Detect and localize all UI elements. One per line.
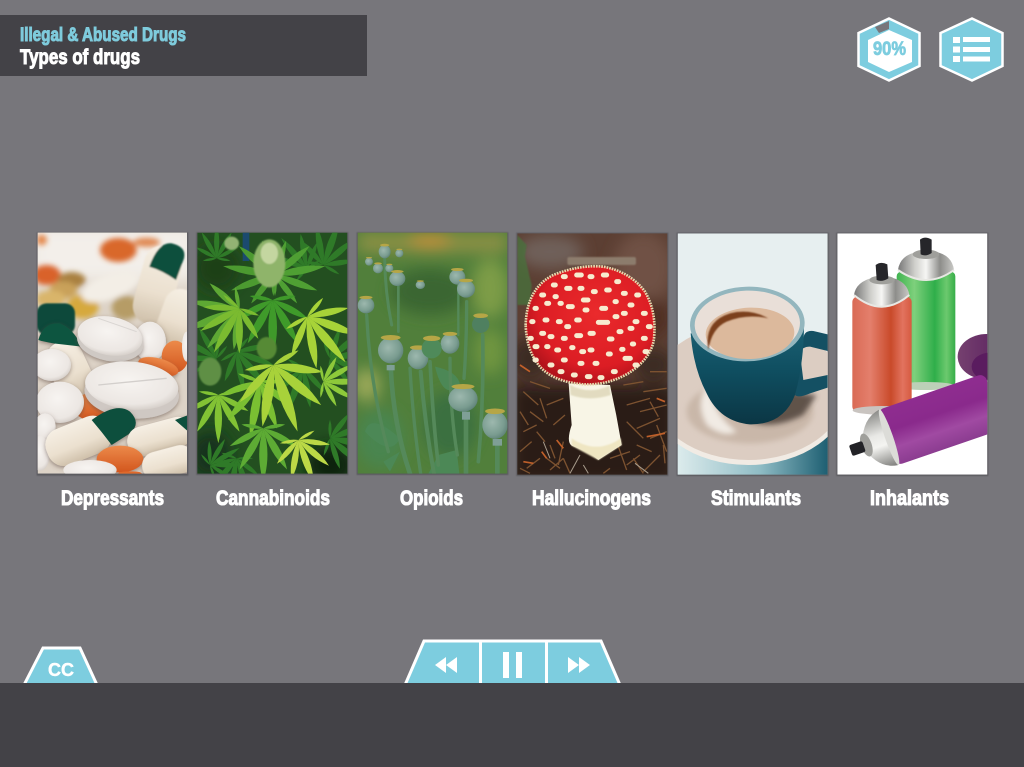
playback controls: [405, 641, 620, 685]
purple can: [849, 375, 988, 466]
label: Opioids: Opioids: [400, 486, 463, 510]
image card: Cannabinoids plant: [196, 232, 348, 476]
label: Cannabinoids: Cannabinoids: [216, 486, 330, 510]
course title: Illegal & Abused Drugs: [20, 25, 186, 46]
label: Stimulants: Stimulants: [711, 486, 801, 510]
icon: fast forward: [568, 657, 590, 673]
image card: Hallucinogens mushroom: [516, 232, 668, 476]
purple cap: [958, 334, 988, 380]
image card: Opioids poppy pods: [353, 232, 508, 475]
image card: Depressants pills: [30, 225, 202, 483]
icon: pause: [503, 652, 522, 678]
label: Depressants: Depressants: [61, 486, 164, 510]
footer bar: [0, 683, 1024, 767]
menu button: [940, 18, 1002, 80]
header bar: [0, 15, 367, 76]
progress badge: 90%: [858, 18, 920, 80]
green can: [897, 238, 955, 390]
label: Inhalants: Inhalants: [870, 486, 949, 510]
image card: Stimulants coffee cup: [676, 232, 829, 476]
red can: [852, 263, 912, 415]
icon: rewind: [435, 657, 457, 673]
image card: Inhalants spray cans: [836, 232, 988, 476]
closed captions button: CC: [48, 660, 74, 680]
closed captions button: [24, 648, 97, 685]
label: Hallucinogens: Hallucinogens: [532, 486, 651, 510]
progress badge: 90%: 90%: [873, 39, 906, 60]
section title: Types of drugs: [20, 46, 140, 69]
